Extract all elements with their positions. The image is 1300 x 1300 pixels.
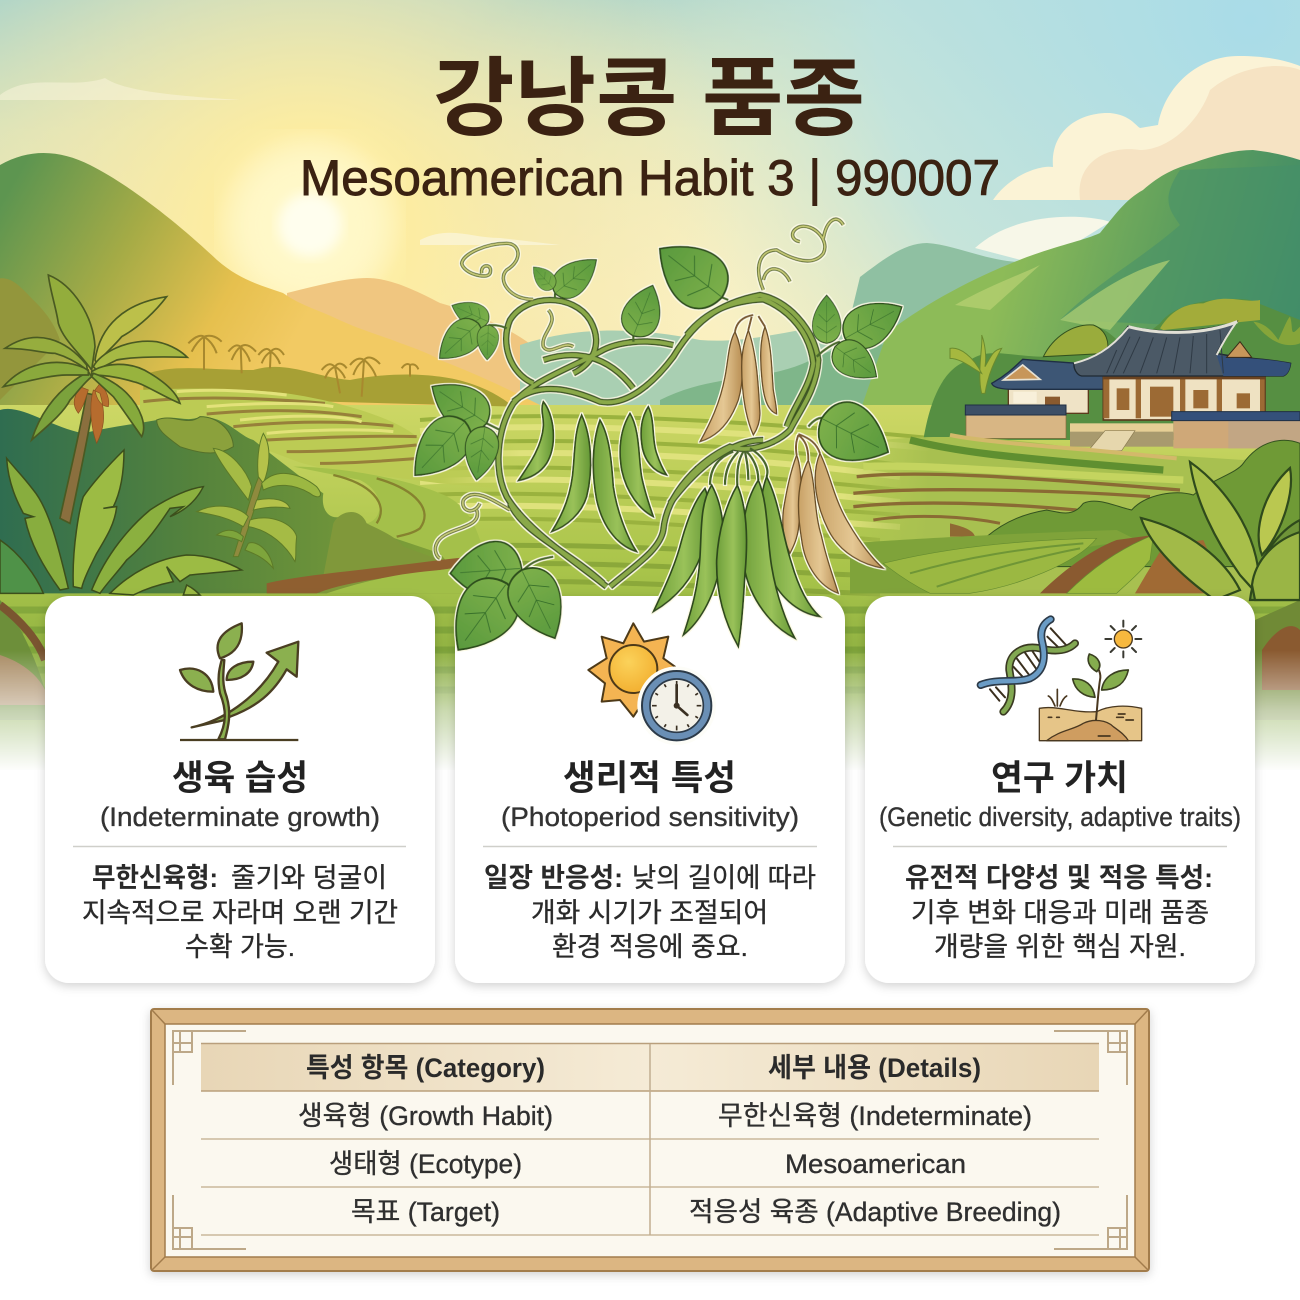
description: 환경 적응에 중요.	[552, 932, 748, 962]
subtitle: Mesoamerican Habit 3 | 990007	[300, 150, 1000, 206]
english subheading: (Genetic diversity, adaptive traits)	[879, 802, 1241, 832]
table header row: 특성 항목 (Category)	[306, 1053, 545, 1083]
description: 개량을 위한 핵심 자원.	[934, 932, 1186, 962]
wooden frame	[151, 1009, 1149, 1271]
description: 낮의 길이에 따라	[632, 863, 816, 893]
table header row	[201, 1044, 1099, 1091]
banana leaves foreground	[0, 450, 242, 595]
panel: data table	[151, 1009, 1149, 1271]
green pods large	[653, 448, 820, 647]
panel: research value	[865, 596, 1255, 983]
tendrils	[435, 219, 843, 558]
terraced fields	[0, 405, 1300, 770]
description: 일장 반응성:	[484, 863, 623, 893]
illustration: bean plant	[398, 219, 912, 667]
description: 지속적으로 자라며 오랜 기간	[82, 898, 398, 928]
english subheading: (Indeterminate growth)	[100, 802, 380, 832]
heading: 생육 습성	[172, 759, 308, 798]
banana plant right	[1141, 462, 1300, 600]
table row: target	[351, 1197, 1061, 1227]
clouds	[0, 56, 1300, 265]
panel: growth habit	[45, 596, 435, 983]
description: 개화 시기가 조절되어	[531, 898, 768, 928]
description	[484, 863, 816, 962]
leaf stems	[487, 293, 840, 570]
icon: dna, soil and sprout	[981, 619, 1142, 741]
table header row: 세부 내용 (Details)	[768, 1053, 981, 1083]
description: 수확 가능.	[185, 932, 295, 962]
right landscape: hanok house, terraces and rows	[843, 299, 1300, 600]
table row: target: 적응성 육종 (Adaptive Breeding)	[689, 1197, 1061, 1227]
corner ornaments	[173, 1031, 1127, 1249]
table row: ecotype: 생태형 (Ecotype)	[329, 1149, 522, 1179]
small banana plant	[197, 433, 320, 568]
icon: sun and clock	[588, 623, 716, 745]
green pods left	[518, 402, 667, 552]
title: 강낭콩 품종	[433, 51, 865, 147]
table row: ecotype	[329, 1149, 966, 1179]
description: 기후 변화 대응과 미래 품종	[911, 898, 1209, 928]
table row: growth habit: 무한신육형 (Indeterminate)	[718, 1101, 1032, 1131]
icon: sprout and arrow	[180, 623, 298, 740]
vines	[498, 295, 818, 587]
table row: ecotype: Mesoamerican	[785, 1149, 966, 1179]
sun	[230, 145, 390, 305]
coconut palm	[3, 275, 187, 523]
description: 줄기와 덩굴이	[231, 863, 387, 893]
tan pods lower	[783, 434, 883, 593]
table row: growth habit	[298, 1101, 1032, 1131]
tan pods upper	[700, 315, 777, 442]
left landscape: forest and terraces	[0, 275, 520, 595]
heading: 연구 가치	[991, 759, 1128, 798]
description	[82, 863, 398, 962]
table row: growth habit: 생육형 (Growth Habit)	[298, 1101, 553, 1131]
distant palm trees	[188, 336, 418, 397]
heading: 생리적 특성	[563, 759, 736, 798]
description: 유전적 다양성 및 적응 특성:	[905, 863, 1213, 893]
table row: target: 목표 (Target)	[351, 1197, 500, 1227]
english subheading: (Photoperiod sensitivity)	[501, 802, 799, 832]
mountains	[0, 150, 1300, 470]
sky background	[0, 0, 1300, 450]
description: 무한신육형:	[92, 863, 218, 893]
foreground fade to white	[0, 650, 1300, 772]
panel: physiological traits	[455, 596, 845, 983]
description	[905, 863, 1213, 962]
leaves	[398, 226, 912, 667]
